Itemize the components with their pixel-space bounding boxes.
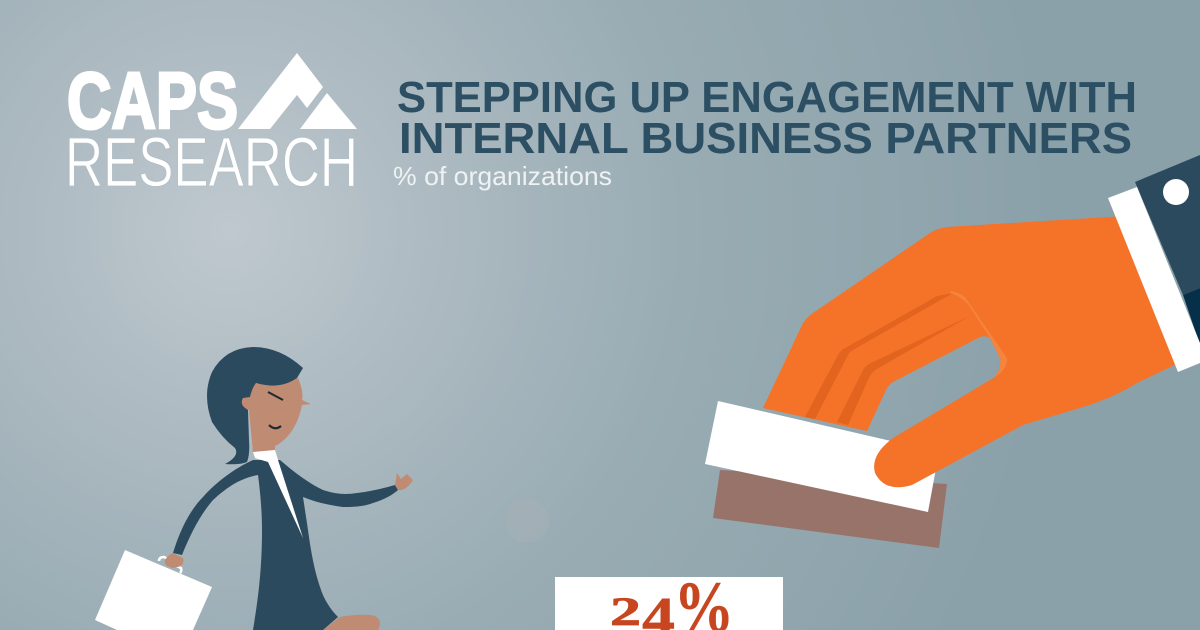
smile <box>269 425 281 428</box>
title <box>397 73 1137 163</box>
face and neck <box>242 378 311 453</box>
stamp base <box>713 470 947 548</box>
jacket and skirt <box>173 460 398 630</box>
finger crease one <box>805 293 953 419</box>
cuff button <box>1163 179 1189 205</box>
sleeve shadow <box>1183 288 1200 345</box>
stat value 24% <box>610 567 734 630</box>
logo mountains <box>238 53 357 129</box>
briefcase <box>95 550 212 630</box>
arm hand <box>395 473 413 490</box>
faint lens circle <box>505 499 549 543</box>
finger highlight <box>950 291 1007 377</box>
stat card <box>555 567 783 630</box>
logo: CAPS Research <box>65 53 358 201</box>
logo wordmark CAPS: CAPS <box>67 56 238 145</box>
eye <box>268 392 283 400</box>
orange hand <box>763 216 1185 487</box>
collar and shirt <box>253 450 303 538</box>
cuff <box>1108 187 1200 372</box>
finger crease two <box>837 316 970 425</box>
sleeve <box>1135 155 1200 295</box>
briefcase handle <box>159 557 181 573</box>
subtitle: % of organizations <box>393 161 612 191</box>
logo wordmark RESEARCH: RESEARCH <box>65 123 358 201</box>
stat card background <box>555 577 783 630</box>
stamp handle <box>705 401 939 512</box>
left hand <box>165 553 183 568</box>
illustration: stamp and hand <box>705 155 1200 548</box>
title: INTERNAL BUSINESS PARTNERS <box>399 114 1132 163</box>
illustration: businesswoman with briefcase <box>95 347 413 630</box>
title: STEPPING UP ENGAGEMENT WITH <box>397 73 1137 122</box>
knee <box>323 615 380 630</box>
hair <box>207 347 303 464</box>
